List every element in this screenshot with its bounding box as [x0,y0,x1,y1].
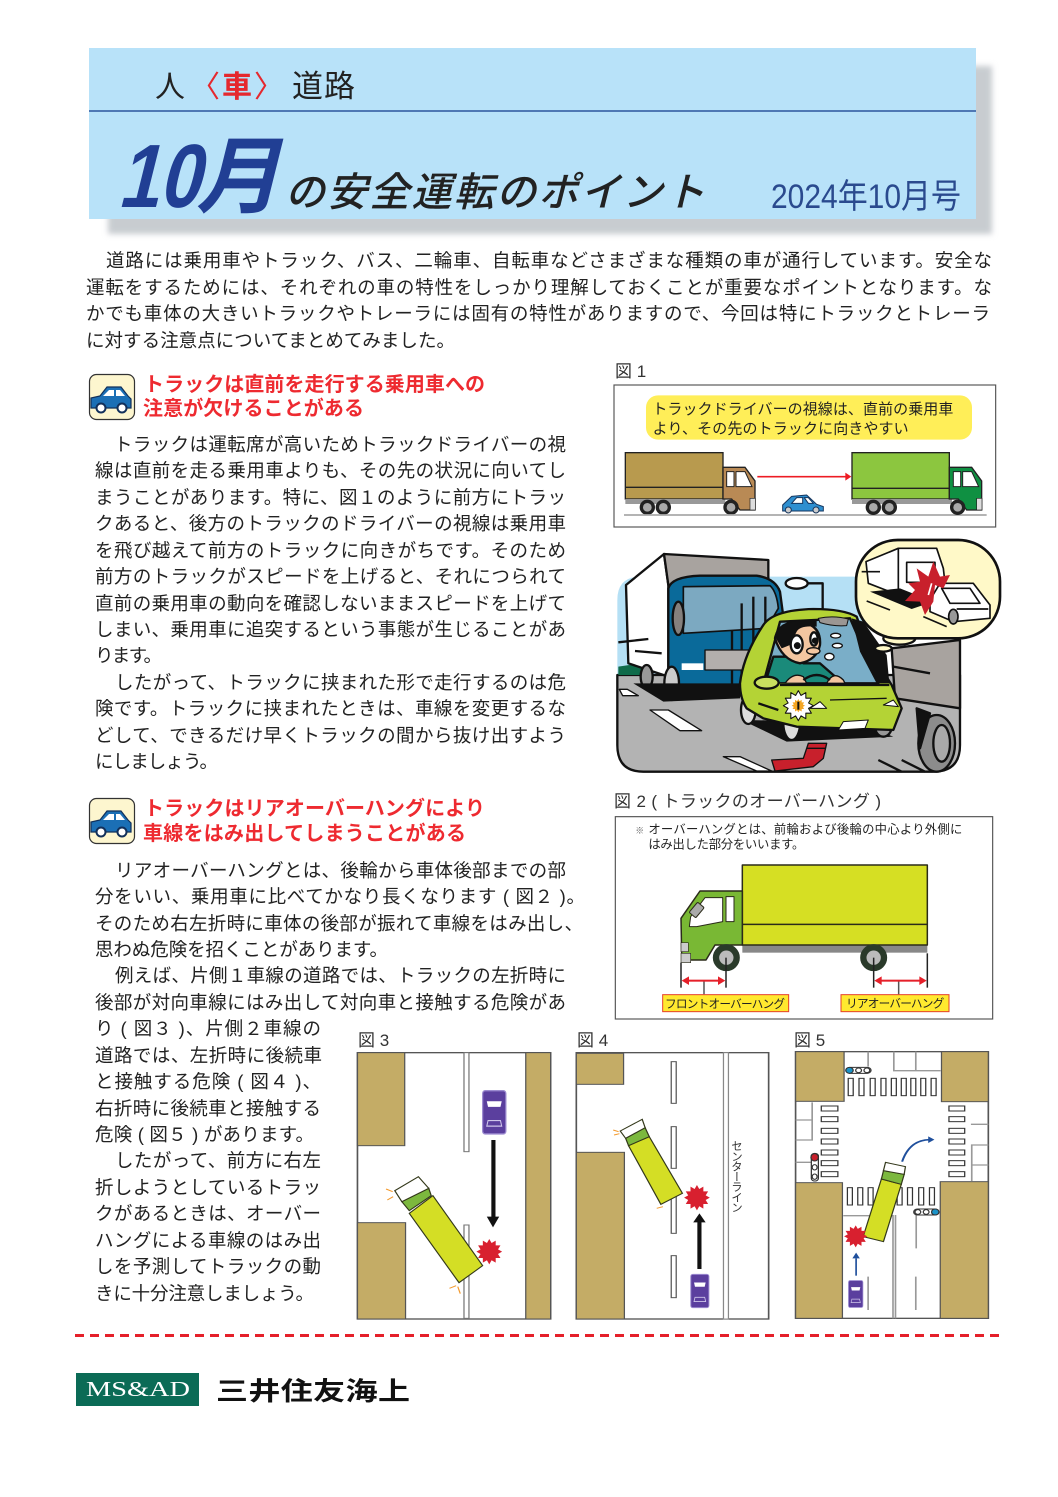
section 2 body: 道路では、左折時に後続車 [95,1045,322,1066]
figure 1 label: 図 1 [615,362,646,381]
figure 2 label: 図 2 ( トラックのオーバーハング ) [614,792,881,811]
section 1 body: したがって、トラックに挟まれた形で走行するのは危 [115,672,566,693]
icon: car badge 2 [90,798,134,844]
section 2 body: 危険 ( 図５ ) があります。 [95,1124,314,1145]
section 1 body: 線は直前を走る乗用車よりも、その先の状況に向いてし [95,460,566,481]
header kicker: 道路 [292,69,355,104]
footer logo [76,1373,410,1406]
crosswalks [821,1078,965,1205]
intro paragraph: 運転をするためには、それぞれの車の特性をしっかり理解しておくことが重要なポイントとなります。な [86,277,992,298]
main title: の安全運転のポイント [283,170,714,215]
note: はみ出した部分をいいます。 [648,837,804,851]
sidewalk outlines [796,1052,988,1318]
section 2 body: 分をいい、乗用車に比べてかなり長くなります ( 図２ )。 [95,886,585,907]
crash burst [905,562,950,615]
figure 5: right turn at intersection [796,1052,988,1318]
dashed divider [75,1334,1000,1337]
heading: section 1: 注意が欠けることがある [143,396,364,420]
section 1 body [95,434,566,772]
green truck [852,453,982,513]
section 1 body: クあると、後方のトラックのドライバーの視線は乗用車 [95,513,566,534]
section 1 body: 直前の乗用車の動向を確認しないままスピードを上げて [95,593,566,614]
purple car [848,1281,863,1307]
header kicker: 人 [155,71,185,104]
section 2 body: ハングによる車線のはみ出 [95,1230,321,1251]
heading: section 2 [143,796,485,845]
heading: section 1: トラックは直前を走行する乗用車への [144,373,485,396]
caption bubble: トラックドライバーの視線は、直前の乗用車 [652,401,953,418]
footer logo: MS&AD [86,1377,190,1401]
main title: 月 [191,131,299,225]
figure 3 label: 図 3 [358,1031,389,1050]
label: front overhang: フロントオーバーハング [665,997,785,1011]
figure 2: overhang diagram [615,817,993,1019]
collision star [476,1239,502,1264]
figure 1: sightline diagram [614,385,996,527]
label: rear overhang: リアオーバーハング [846,996,945,1010]
thought bubble [856,540,1000,652]
section 2 body: 折しようとしているトラッ [95,1177,321,1198]
purple car [691,1274,709,1308]
section 1 body: トラックは運転席が高いためトラックドライバーの視 [114,434,566,455]
caption bubble [646,395,972,440]
right truck rear [878,640,960,772]
header kicker: 〉 [254,71,284,104]
section 1 body: を飛び越えて前方のトラックに向きがちです。そのため [95,540,566,561]
header kicker: 〈 [190,71,220,104]
icon: car badge 1 [90,374,134,420]
section 1 body: どして、できるだけ早くトラックの間から抜け出すよう [95,725,566,746]
section 2 body: 思わぬ危険を招くことがあります。 [95,939,388,960]
intro paragraph: 道路には乗用車やトラック、バス、二輪車、自転車などさまざまな種類の車が通行しています。安全な [106,250,992,271]
section 2 body: そのため右左折時に車体の後部が振れて車線をはみ出し、 [95,913,583,934]
overhang arrows [682,976,927,985]
imagined car [923,583,990,627]
ground line [624,512,987,517]
footer logo: 三井住友海上 [216,1378,410,1406]
section 2 body: 右折時に後続車と接触する [95,1098,321,1119]
note: ※ [635,825,644,835]
skid mark [772,743,827,771]
heading: section 1 [143,373,485,420]
section 1 body: 険です。トラックに挟まれたときは、車線を変更するな [95,698,566,719]
intro paragraph: かでも車体の大きいトラックやトレーラには固有の特性がありますので、今回は特にトラックとトレーラ [86,303,990,324]
center line label: センターライン [730,1140,743,1213]
motion ticks [613,1130,663,1208]
section 2 body: しを予測してトラックの動 [95,1256,321,1277]
main title: 10 [112,126,219,227]
street lamp [786,578,823,612]
section 2 body [95,860,585,1304]
header kicker [155,69,355,104]
note: オーバーハングとは、前輪および後輪の中心より外側に [648,821,962,836]
purple car [483,1091,506,1134]
truck turning [395,1177,483,1283]
truck turning [863,1162,905,1242]
imagined truck [862,548,947,610]
truck turning [620,1119,682,1204]
heading: section 2: トラックはリアオーバーハングにより [144,796,485,820]
header banner [89,48,992,234]
section 2 body: り ( 図３ )、片側２車線の [95,1018,321,1039]
turn arrow [902,1136,934,1162]
header kicker: 車 [222,71,252,104]
follow arrow [852,1253,860,1276]
figure 5 label: 図 5 [794,1031,825,1050]
traffic lights [811,1067,939,1215]
caption bubble: より、その先のトラックに向きやすい [653,420,909,437]
sightline arrow [757,473,851,481]
section 2 body: 後部が対向車線にはみ出して対向車と接触する危険があ [95,992,566,1013]
sky [617,577,863,678]
section 2 body: したがって、前方に右左 [115,1150,321,1171]
dimension lines [681,953,927,994]
road [617,675,960,772]
section 1 body: まうことがあります。特に、図１のように前方にトラッ [95,487,566,508]
motion ticks [386,1189,460,1294]
section 2 body: リアオーバーハングとは、後輪から車体後部までの部 [115,860,566,881]
figure 4: left turn, two-lane road [576,1053,769,1319]
label: rear overhang [841,995,949,1012]
section 2 body: クがあるときは、オーバー [95,1203,321,1224]
intro paragraph: に対する注意点についてまとめてみました。 [86,330,455,351]
section 1 body: にしましょう。 [95,751,218,772]
section 2 body: 例えば、片側１車線の道路では、トラックの左折時に [115,965,566,986]
following arrow [693,1213,706,1269]
section 2 body: きに十分注意しましょう。 [95,1283,314,1304]
main title [112,126,714,227]
figure 3: left turn, oncoming lane [357,1053,551,1319]
section 2 body: と接触する危険 ( 図４ )、 [95,1071,321,1092]
driver [765,620,845,683]
issue date: 2024年10月号 [771,178,961,216]
impact star [783,691,813,721]
brown truck [625,453,755,513]
intro paragraph [86,250,992,351]
truck side view [681,865,927,968]
figure 4 label: 図 4 [577,1031,608,1050]
heading: section 2: 車線をはみ出してしまうことがある [143,821,466,845]
section 1 body: しまい、乗用車に追突するという事態が生じることがあ [95,619,566,640]
blue truck behind [618,554,783,702]
illustration: rear-end collision between trucks [617,540,1000,772]
green car [740,609,902,742]
lane markings [619,689,772,771]
section 1 body: 前方のトラックがスピードを上げると、それにつられて [95,566,566,587]
collision star [684,1185,710,1210]
collision star [844,1225,867,1247]
section 1 body: ります。 [95,645,162,666]
oncoming arrow [487,1140,499,1227]
note [635,821,962,851]
small blue car [783,495,823,513]
